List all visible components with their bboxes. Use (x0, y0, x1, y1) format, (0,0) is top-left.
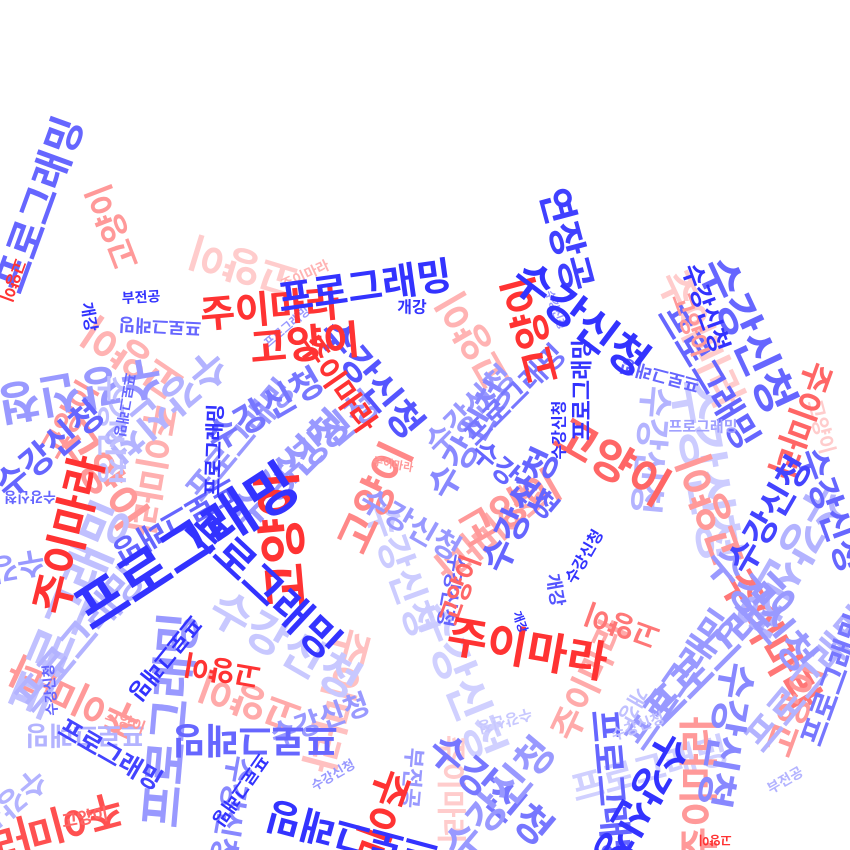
word: 수강신청 pale mid: 수강신청 (356, 497, 444, 643)
word: 수강신청 pale: 수강신청 (661, 375, 749, 565)
word: 프로그래밍 thin blue: 프로그래밍 (123, 611, 207, 705)
word: 프로그래밍 lavender left: 프로그래밍 (0, 493, 141, 727)
word: 개강 pale: 개강 (613, 684, 652, 727)
word: 수강신청 small left: 수강신청 (4, 489, 56, 505)
word: 프로그래밍 small left: 프로그래밍 (25, 720, 145, 750)
word: 고양이 red top: 고양이 (248, 318, 362, 372)
word: 수강신청 small blue: 수강신청 (676, 260, 734, 356)
word: 수강신청 small center: 수강신청 (433, 552, 468, 628)
word: 수강신청 middle: 수강신청 (263, 384, 387, 496)
word: 수강신청 lavender: 수강신청 (201, 582, 369, 708)
word: 프로그래밍 blue diagonal: 프로그래밍 (64, 452, 310, 642)
word: 프로그래밍 vertical blue: 프로그래밍 (201, 404, 228, 496)
word: 프로그래밍 upside down: 프로그래밍 (118, 314, 202, 338)
word: 수강신청 right pale: 수강신청 (625, 384, 675, 516)
word: 수강신청 blue: 수강신청 (502, 253, 658, 387)
word: 고양이 salmon mid: 고양이 (451, 463, 569, 557)
word: 수강신청 center lower: 수강신청 (466, 435, 564, 525)
word: 주이마라 red center: 주이마라 (443, 612, 611, 688)
word: 프로그래밍 thin bottom: 프로그래밍 (208, 750, 272, 830)
word: 연장공 blue: 연장공 (531, 184, 599, 296)
word: 수강신청 blue right: 수강신청 (721, 449, 819, 581)
word: 수강신청 large right: 수강신청 (689, 249, 805, 421)
word: 고양이 pink small: 고양이 (431, 284, 519, 396)
word: 프로그래밍 tiny: 프로그래밍 (261, 303, 313, 350)
word: 수강신청 small vertical: 수강신청 (40, 664, 60, 716)
word: 수강신청 small right: 수강신청 (609, 710, 667, 744)
word: 수강신청 center second: 수강신청 (421, 374, 519, 506)
word: 프로그래밍 center: 프로그래밍 (458, 338, 572, 452)
word: 프로그래밍 right block: 프로그래밍 (635, 565, 805, 735)
word: 주이마라 cluster: 주이마라 (711, 561, 829, 719)
word: 프로그래밍 right: 프로그래밍 (650, 298, 766, 456)
word: 고양이 coral mid: 고양이 (434, 551, 486, 629)
word: 수강신청 upper center: 수강신청 (309, 313, 431, 447)
word: 주이마라 red top: 주이마라 (199, 283, 342, 337)
word: 주이마라 pink: 주이마라 (118, 401, 182, 539)
word: 수강신청 pale vertical: 수강신청 (94, 375, 126, 485)
word: 프로그래밍 periwinkle mid: 프로그래밍 (179, 372, 301, 508)
word: 부전공 blue: 부전공 (121, 288, 161, 306)
word: 고양이 coral small: 고양이 (580, 597, 664, 653)
word: 고양이 red lower: 고양이 (181, 648, 263, 692)
word: 주이마라 salmon: 주이마라 (3, 646, 147, 744)
word: 고양이 far right: 고양이 (760, 658, 830, 762)
word: 고양이 pale tiny: 고양이 (802, 397, 839, 457)
word: 주이마라 tiny top: 주이마라 (278, 257, 332, 293)
word: 주이마라 pink mid: 주이마라 (426, 472, 554, 588)
word: 고양이 pink: 고양이 (80, 179, 146, 275)
word: 개강 blue left: 개강 (77, 301, 100, 333)
word: 프로그래밍 lower left dark: 프로그래밍 (53, 714, 167, 796)
word: 프로그래밍 vertical center: 프로그래밍 (570, 339, 594, 441)
word: 고양이 salmon: 고양이 (45, 411, 155, 539)
word: 프로그래밍 blue descending: 프로그래밍 (176, 502, 350, 668)
word: 프로그래밍 left: 프로그래밍 (8, 560, 152, 720)
word: 주이마라 coral right: 주이마라 (762, 357, 838, 483)
word: 수강신청 small angle: 수강신청 (266, 688, 374, 752)
word: 수강신청 tiny top: 수강신청 (542, 288, 569, 331)
word: 수강신청 periwinkle center: 수강신청 (354, 483, 466, 567)
word: 프로그래밍 blue top: 프로그래밍 (276, 255, 454, 321)
word: 프로그래밍 mid left: 프로그래밍 (107, 471, 243, 569)
word: 수강신청 bottom: 수강신청 (691, 659, 759, 811)
word: 고양이 coral: 고양이 (545, 409, 679, 515)
word: 고양이 coral right: 고양이 (666, 289, 714, 361)
word: 수강신청 top left: 수강신청 (94, 341, 236, 469)
word: 개강 blue small center: 개강 (510, 609, 530, 635)
word: 고양이 salmon center: 고양이 (329, 436, 421, 560)
word: 개강 blue center: 개강 (542, 572, 568, 608)
word: 부전공 lower: 부전공 (397, 747, 427, 809)
word: 고양이 pink lower: 고양이 (194, 662, 306, 738)
word: 프로그래밍 tiny left: 프로그래밍 (112, 372, 138, 438)
word: 고양이 salmon right: 고양이 (670, 447, 754, 573)
word: 주이마라 pink lower: 주이마라 (295, 623, 375, 777)
word: 고양이 red center: 고양이 (249, 469, 317, 611)
word: 프로그래밍 small pale: 프로그래밍 (668, 418, 738, 436)
word: 주이마라 red left: 주이마라 (27, 451, 113, 619)
word: 고양이 left: 고양이 (35, 376, 105, 464)
word: 수강신청 upper left mid: 수강신청 (199, 361, 331, 459)
word: 수강신청 pale center: 수강신청 (405, 594, 515, 766)
word: 주이마라 red diagonal: 주이마라 (292, 330, 382, 440)
word: 프로그래밍 vertical periwinkle: 프로그래밍 (134, 610, 206, 830)
word: 수강신청 center: 수강신청 (473, 441, 567, 579)
word: 고양이 small bottom left: 고양이 (60, 805, 110, 831)
word: 개강 blue top: 개강 (397, 298, 427, 316)
word: 고양이 pink large: 고양이 (75, 308, 191, 406)
word: 수강신청 right cluster: 수강신청 (727, 476, 850, 644)
word: 부전공 lower right: 부전공 (764, 763, 806, 797)
word: 주이마라 tiny center: 주이마라 (372, 455, 414, 474)
word: 프로그래밍 pale bottom: 프로그래밍 (567, 730, 733, 810)
word: 수강신청 small pale: 수강신청 (476, 705, 534, 735)
word: 프로그래밍 small right: 프로그래밍 (617, 355, 703, 395)
word: 수강신청 vertical small: 수강신청 (550, 401, 568, 459)
word: 수강신청 small blue center: 수강신청 (562, 527, 607, 587)
word: 고양이 tiny red right: 고양이 (698, 833, 732, 847)
word: 주이마라 pale bottom: 주이마라 (434, 735, 466, 845)
word: 수강신청 right middle: 수강신청 (696, 539, 824, 681)
word: 프로그래밍 lower left: 프로그래밍 (172, 720, 338, 760)
word: 주이마라 pink center: 주이마라 (545, 613, 635, 747)
word: 수강신청 upper cluster: 수강신청 (222, 402, 358, 538)
word: 주이마라 pale: 주이마라 (649, 264, 751, 416)
word: 고양이 red upright: 고양이 (496, 271, 568, 389)
word: 수강신청 tiny: 수강신청 (309, 757, 357, 793)
word: 프로그래밍 lower block: 프로그래밍 (618, 603, 742, 757)
word: 고양이 small: 고양이 (103, 707, 147, 737)
word: 고양이 pale: 고양이 (184, 228, 302, 302)
word: 수강신청 center top: 수강신청 (419, 359, 521, 461)
